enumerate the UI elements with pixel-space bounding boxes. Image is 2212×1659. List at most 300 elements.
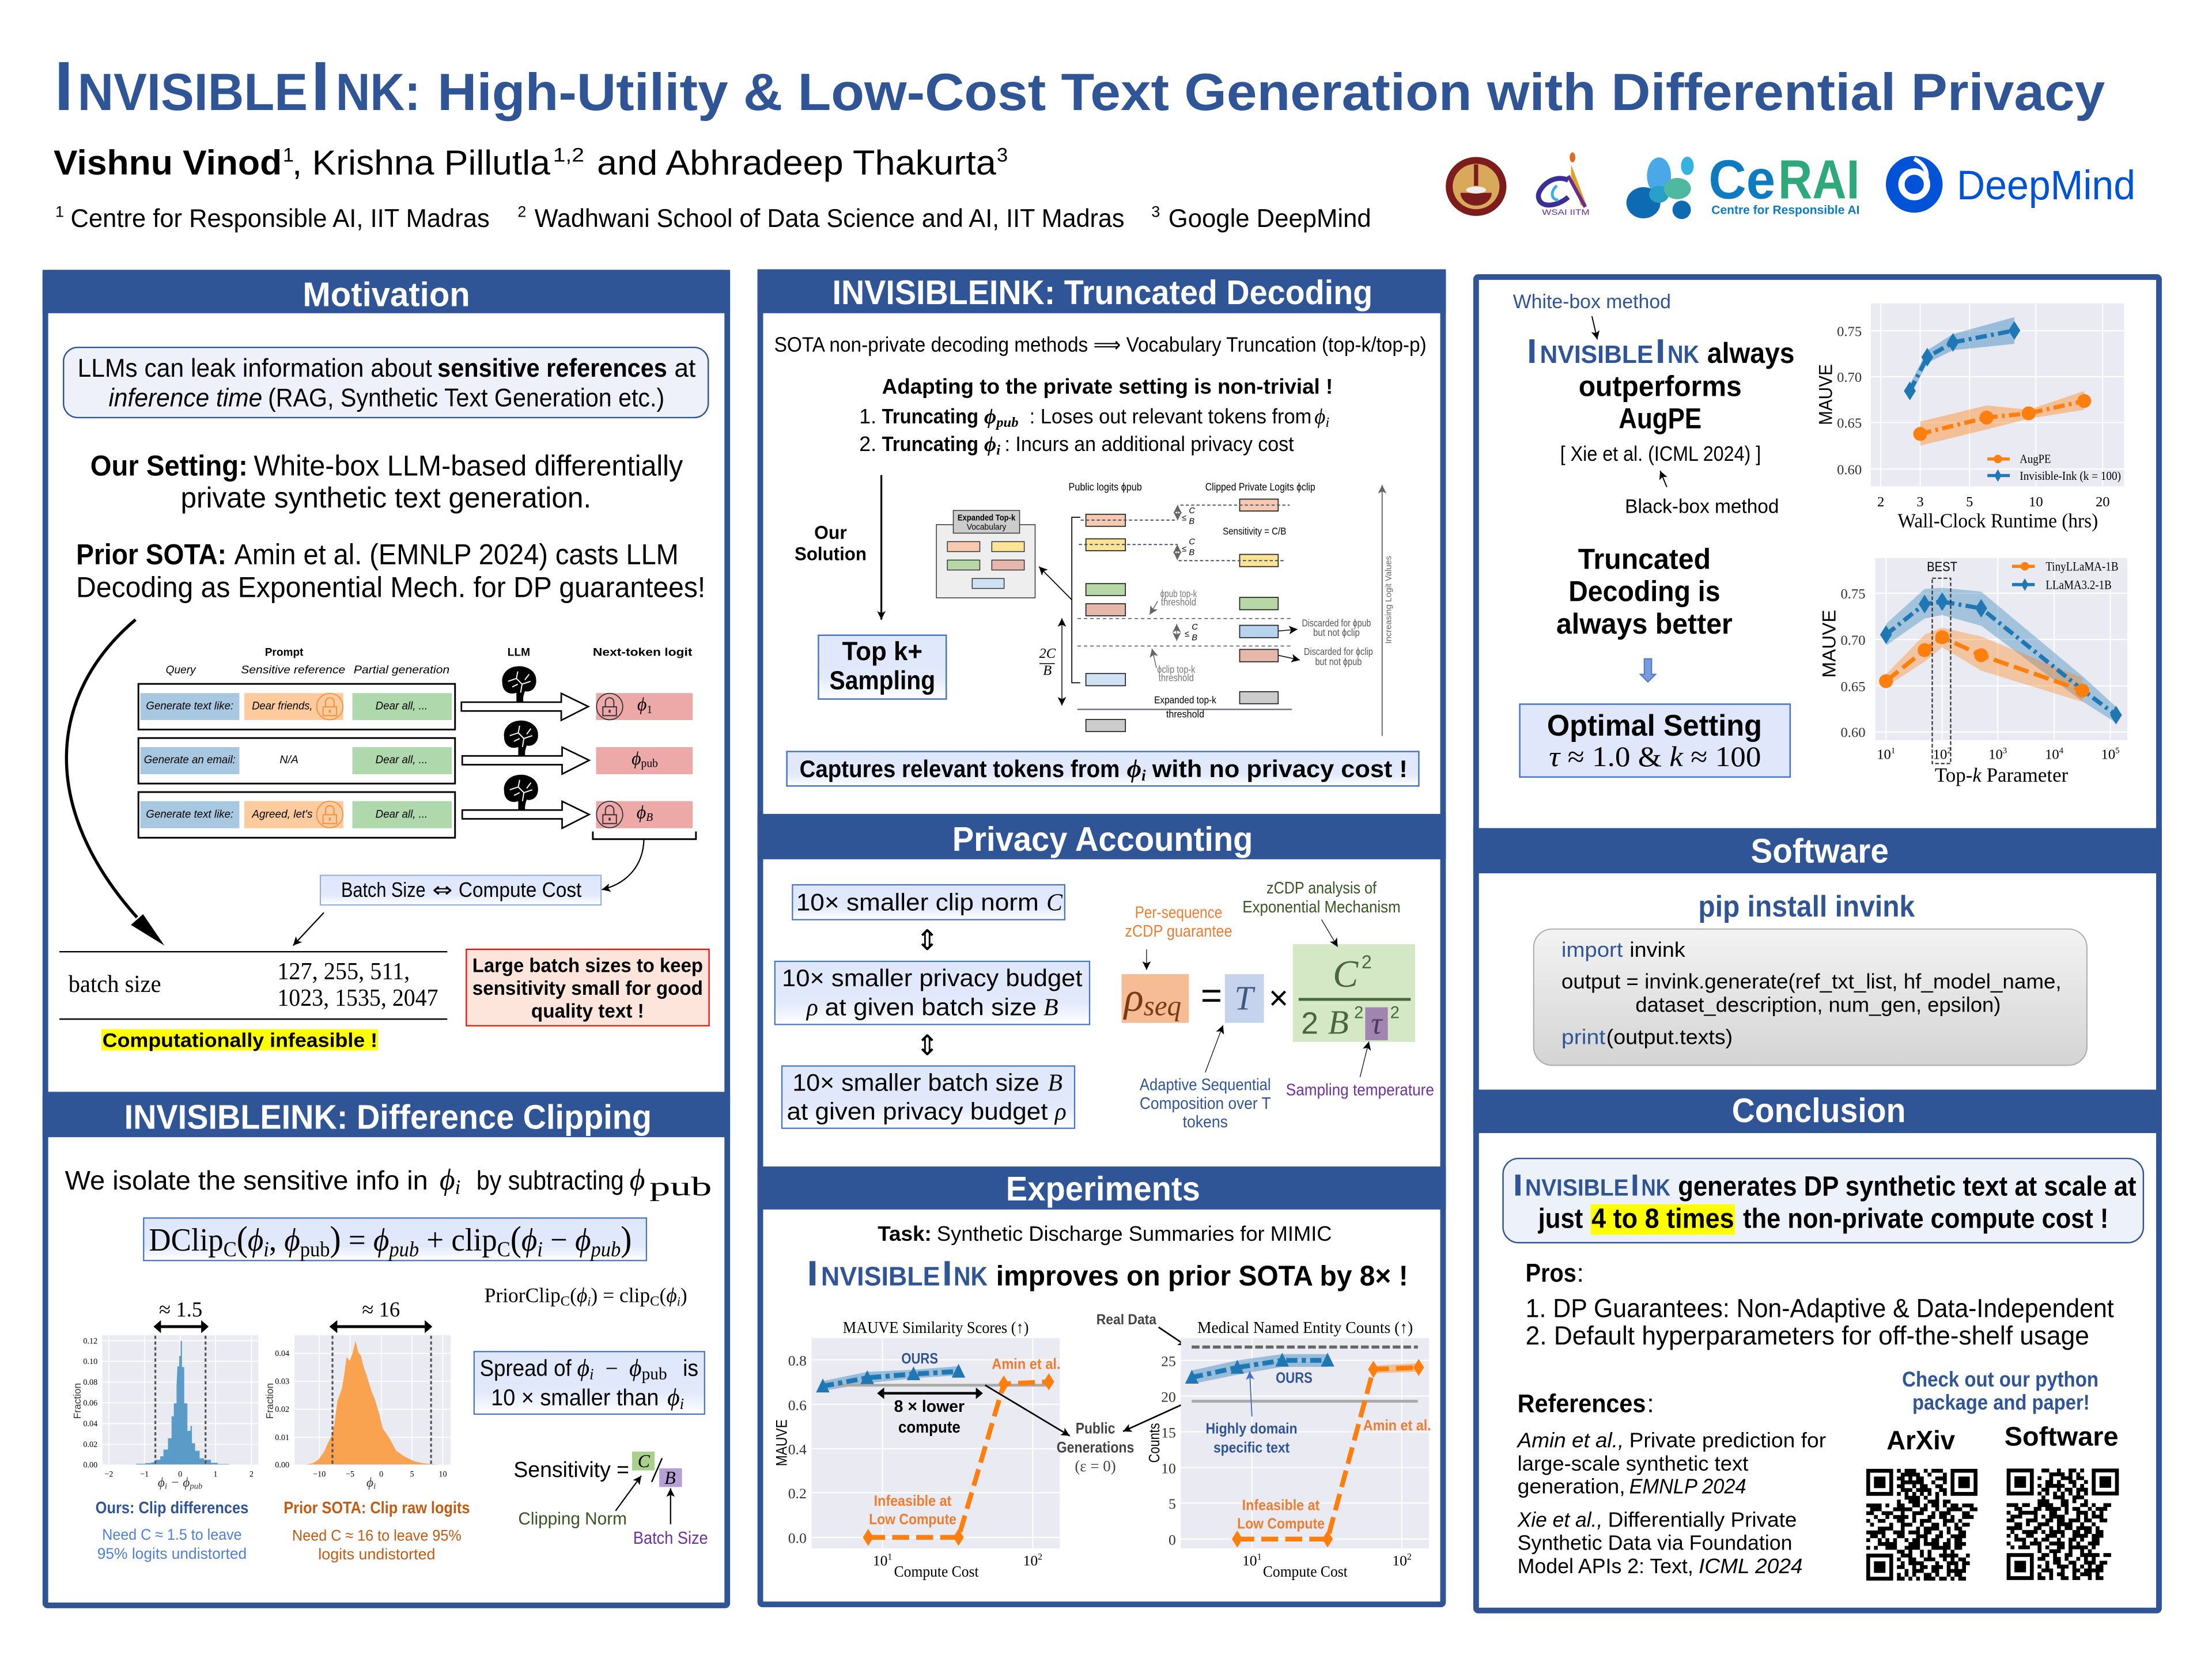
QR: ArXiv <box>1866 1425 1977 1579</box>
diagram: logit columns: threshold <box>1159 672 1194 683</box>
caption: prior SOTA: Need C ≈ 16 to leave 95% <box>292 1527 462 1544</box>
chart: medical named entity counts <box>1147 1319 1431 1580</box>
logo: CeRAI: RAI <box>1778 149 1859 211</box>
formula: DClip: = ϕ <box>349 1221 389 1257</box>
label: adaptive composition: Composition over T <box>1140 1094 1271 1112</box>
formula: DClip: , <box>269 1221 284 1257</box>
bracket and arrow <box>593 831 696 889</box>
chart: top-k vs MAUVE: 2 <box>1947 747 1952 756</box>
chart: medical named entity counts: 1 <box>1257 1552 1262 1562</box>
histogram: clip differences: 0.00 <box>83 1461 97 1470</box>
heading: Software: Software <box>1750 832 1889 870</box>
list: truncation problems: pub <box>995 415 1019 430</box>
formula: DClip: pub <box>387 1237 419 1261</box>
callout: key result: I <box>1631 1168 1639 1202</box>
callout: key result: the non-private compute cost ! <box>1743 1203 2108 1234</box>
chart: MAUVE similarity scores: 1 <box>887 1552 892 1562</box>
row 3: Agreed, let's <box>251 808 313 821</box>
heading: improves on SOTA: I <box>942 1253 952 1293</box>
formula: PriorClip: PriorClip <box>485 1283 561 1306</box>
label: adaptive composition <box>1140 1025 1271 1131</box>
diagram: logit columns: 2C <box>1039 646 1056 661</box>
logit outputs: ϕ <box>637 802 646 822</box>
formula: sensitivity: Sensitivity = <box>513 1458 629 1482</box>
chart: runtime vs MAUVE: Invisible-Ink (k = 100) <box>2020 469 2121 483</box>
callout: large batch sizes <box>466 949 709 1026</box>
row 3: Dear all, ... <box>376 808 428 821</box>
chart: MAUVE similarity scores: 0.8 <box>788 1352 807 1369</box>
diagram: logit columns: ≤ <box>1182 545 1186 554</box>
callout: Top k+ sampling: Sampling <box>830 665 935 695</box>
formula: PriorClip: i <box>677 1294 680 1309</box>
label: zCDP analysis: Exponential Mechanism <box>1242 897 1401 916</box>
title: NK: <box>336 63 421 122</box>
formula: PriorClip: ϕ <box>666 1283 677 1306</box>
callout: LLMs leak: sensitive references <box>437 354 667 382</box>
diagram: logit columns: but not ϕclip <box>1313 627 1360 638</box>
text: isolate sensitive info: We isolate the sensitive info in <box>65 1165 428 1195</box>
chart: MAUVE similarity scores: compute <box>898 1418 961 1436</box>
diagram: logit columns: Increasing Logit Values <box>1385 556 1394 644</box>
text: check out package: Check out our python <box>1902 1368 2098 1391</box>
text: our setting <box>90 449 683 514</box>
chart: runtime vs MAUVE <box>1815 304 2124 532</box>
panel: Software <box>1473 830 2162 1093</box>
row 1 <box>138 684 455 729</box>
chart: top-k vs MAUVE: 0.60 <box>1840 725 1866 741</box>
heading: Motivation: Motivation <box>303 276 470 314</box>
zoomed contents <box>71 1283 708 1563</box>
highlight: computationally infeasible: Computationally infeasible ! <box>103 1030 377 1052</box>
chart: MAUVE similarity scores: Infeasible at <box>874 1493 952 1509</box>
histogram: clip differences: 2 <box>249 1470 254 1479</box>
code block <box>1534 929 2087 1065</box>
references <box>1517 1390 1826 1578</box>
row 1: Generate text like: <box>146 700 233 713</box>
callout: spread: is <box>683 1355 698 1381</box>
formula: PriorClip: i <box>587 1294 591 1309</box>
text: white-box method note <box>1513 291 1671 339</box>
authors: 1,2 <box>553 145 584 166</box>
column headings <box>166 647 693 676</box>
callout: key result: NVISIBLE <box>1525 1174 1629 1200</box>
text: isolate sensitive info: i <box>455 1177 460 1199</box>
heading: improves on SOTA <box>807 1253 1408 1293</box>
panel: Motivation <box>43 270 730 1099</box>
chart: medical named entity counts: OURS <box>1276 1370 1313 1387</box>
text: task: Synthetic Discharge Summaries for MIMIC <box>937 1222 1332 1245</box>
histogram: clip differences: −1 <box>140 1470 149 1479</box>
callout: key result: NK <box>1641 1174 1670 1200</box>
chart: MAUVE similarity scores: OURS <box>901 1351 938 1367</box>
formula: DClip: C <box>497 1237 511 1261</box>
panel: Conclusion <box>1473 1090 2162 1611</box>
equation: per-sequence zCDP: × <box>1269 979 1288 1017</box>
formula: DClip: pub <box>589 1237 621 1261</box>
text: truncated decoding: Decoding is <box>1568 575 1721 608</box>
chart: top-k vs MAUVE <box>1819 558 2127 786</box>
chart: medical named entity counts: Medical Named Entity Counts (↑) <box>1197 1319 1413 1337</box>
column headings: Sensitive reference <box>241 664 345 676</box>
text: isolate sensitive info: by subtracting <box>477 1165 624 1195</box>
text: always outperforms: I <box>1655 332 1665 370</box>
formula: sensitivity: C <box>638 1451 651 1471</box>
chart: medical named entity counts: 20 <box>1161 1388 1176 1405</box>
text: always outperforms: AugPE <box>1619 402 1701 434</box>
formula: DClip: ) <box>621 1219 632 1259</box>
callout: spread <box>474 1351 705 1414</box>
label: per-sequence guarantee <box>1125 903 1232 970</box>
chart: medical named entity counts: 2 <box>1407 1552 1412 1562</box>
annotation: spread 16: ≈ 16 <box>362 1297 400 1321</box>
formula: PriorClip: ) <box>680 1283 687 1306</box>
label: sampling temperature: Sampling temperature <box>1286 1080 1434 1099</box>
box: batch size: at given privacy budget <box>787 1098 1048 1125</box>
histogram: raw logits: −5 <box>346 1470 354 1479</box>
references: ICML 2024 <box>1699 1555 1803 1578</box>
diagram: logit columns: threshold <box>1161 596 1196 608</box>
icons: LLM brains <box>502 666 538 810</box>
text: always outperforms <box>1527 332 1795 434</box>
formula: sensitivity: Batch Size <box>633 1528 708 1548</box>
formula: DClip: − <box>543 1221 575 1257</box>
chart: MAUVE similarity scores: Low Compute <box>869 1512 956 1528</box>
histogram: raw logits: 0.00 <box>275 1461 289 1470</box>
histogram: clip differences: i <box>165 1482 167 1491</box>
logit outputs: ϕ <box>637 694 646 714</box>
label: per-sequence guarantee: Per-sequence <box>1135 903 1222 922</box>
caption: ours <box>96 1498 248 1562</box>
list: truncation problems: Truncating <box>882 405 978 428</box>
callout: captures relevant tokens <box>787 752 1419 786</box>
references: References <box>1518 1390 1646 1418</box>
row 3: Generate text like: <box>146 808 233 821</box>
equation: per-sequence zCDP <box>1122 944 1415 1042</box>
chart: runtime vs MAUVE: 5 <box>1966 494 1973 510</box>
chart: top-k vs MAUVE: TinyLLaMA-1B <box>2045 559 2119 574</box>
formula: DClip: ϕ <box>248 1221 263 1257</box>
diagram: logit columns: ϕpub top-k <box>1160 588 1197 599</box>
row 2 <box>138 738 455 783</box>
chart: top-k vs MAUVE: 10 <box>2045 747 2059 762</box>
chart: MAUVE similarity scores: 0.0 <box>788 1530 807 1547</box>
chart: medical named entity counts: Highly domain <box>1205 1421 1298 1437</box>
chart: runtime vs MAUVE: MAUVE <box>1815 364 1836 425</box>
equation: per-sequence zCDP: 2 <box>1362 952 1372 972</box>
histogram: raw logits <box>264 1335 451 1491</box>
label: adaptive composition: tokens <box>1183 1112 1228 1131</box>
diagram: logit columns: Sensitivity = C/B <box>1223 525 1286 537</box>
list: truncation problems: ϕ <box>984 404 996 428</box>
diagram: logit columns: threshold <box>1166 708 1204 720</box>
box: batch size: 10× smaller batch size <box>792 1069 1039 1096</box>
title <box>55 47 2105 125</box>
callout: key result: I <box>1513 1168 1523 1202</box>
text: check out package: package and paper! <box>1912 1391 2090 1414</box>
caption: ours: Need C ≈ 1.5 to leave <box>102 1526 242 1543</box>
affiliations: 3 <box>1151 203 1160 221</box>
histogram: raw logits: i <box>373 1482 376 1491</box>
box: privacy budget: at given batch size <box>825 993 1037 1020</box>
diagram: logit columns: ϕclip top-k <box>1157 664 1196 675</box>
list: pros: 1. DP Guarantees: Non-Adaptive & Data-Independent <box>1526 1293 2114 1323</box>
chart: MAUVE similarity scores <box>773 1319 1061 1580</box>
panel: Difference Clipping <box>43 1094 730 1605</box>
affiliations: Google DeepMind <box>1169 204 1371 233</box>
diagram: logit columns: B <box>1189 517 1194 527</box>
arrows: LLM outputs <box>462 694 589 828</box>
chart: MAUVE similarity scores: 2 <box>1038 1552 1042 1562</box>
formula: DClip: ϕ <box>521 1221 537 1257</box>
references: EMNLP 2024 <box>1629 1475 1746 1498</box>
text: always outperforms: NK <box>1667 341 1699 369</box>
references: Model APIs 2: Text, <box>1518 1555 1693 1578</box>
heading: Truncated Decoding: INVISIBLEINK: Truncated Decoding <box>833 274 1372 312</box>
chart: runtime vs MAUVE: 10 <box>2029 494 2043 510</box>
text: always outperforms: outperforms <box>1579 370 1742 403</box>
callout: LLMs leak: LLMs can leak information about <box>78 354 432 382</box>
formula: PriorClip: ( <box>570 1283 577 1306</box>
annotation: spread 16 <box>330 1297 432 1333</box>
histogram: clip differences: pub <box>189 1482 202 1491</box>
chart: runtime vs MAUVE: 0.75 <box>1837 324 1862 339</box>
callout: LLMs leak: at <box>674 354 695 382</box>
histogram: clip differences: 0.02 <box>83 1440 97 1449</box>
table: batch sizes: batch size <box>69 971 161 998</box>
logos <box>1446 149 2135 219</box>
label: real data: Real Data <box>1096 1312 1156 1328</box>
chart: runtime vs MAUVE: 2 <box>1877 494 1884 510</box>
formula: sensitivity: Clipping Norm <box>518 1509 627 1529</box>
label: public generations <box>985 1385 1186 1475</box>
text: truncated decoding: Truncated <box>1578 543 1711 575</box>
equation: per-sequence zCDP: τ <box>1371 1006 1383 1040</box>
authors: 3 <box>997 145 1008 166</box>
formula: DClip: ϕ <box>284 1221 300 1257</box>
logo: IIT Madras seal <box>1446 157 1506 216</box>
box: privacy budget: B <box>1043 994 1058 1021</box>
panel: Experiments <box>758 1166 1446 1604</box>
formula: DClip: i <box>263 1237 269 1261</box>
histogram: clip differences: 0.12 <box>83 1336 97 1346</box>
panel: Truncated Decoding <box>758 269 1446 820</box>
histogram: clip differences <box>71 1335 258 1491</box>
list: truncation problems: 1. <box>859 405 876 428</box>
column headings: Next-token logit <box>593 647 693 659</box>
box: clip norm: C <box>1046 889 1063 916</box>
logo: DeepMind <box>1886 156 2135 213</box>
text: check out package <box>1902 1368 2098 1414</box>
text: prior SOTA: Amin et al. (EMNLP 2024) casts LLM <box>235 538 679 571</box>
logo: WSAI IITM: WSAI IITM <box>1542 208 1590 217</box>
list: truncation problems: 2. <box>859 433 876 456</box>
chart: runtime vs MAUVE: 0.65 <box>1837 416 1862 431</box>
equation: per-sequence zCDP: T <box>1235 979 1256 1017</box>
references: Synthetic Data via Foundation <box>1518 1531 1793 1554</box>
label: per-sequence guarantee: zCDP guarantee <box>1125 922 1232 940</box>
label: public generations: Public <box>1076 1420 1115 1437</box>
diagram: logit columns: Clipped Private Logits ϕclip <box>1205 481 1315 493</box>
diagram: logit columns: Discarded for ϕclip <box>1304 646 1373 657</box>
histogram: raw logits: 0.01 <box>275 1433 289 1442</box>
label: public generations: (ε = 0) <box>1075 1457 1116 1475</box>
callout: LLMs leak: inference time <box>109 384 262 412</box>
icon: equivalence: ⇕ <box>916 923 939 957</box>
code block: dataset_description, num_gen, epsilon) <box>1635 993 2001 1016</box>
logo: DeepMind: DeepMind <box>1957 162 2135 209</box>
chart: runtime vs MAUVE: Wall-Clock Runtime (hrs) <box>1898 510 2098 532</box>
text: task: Task: <box>878 1222 932 1245</box>
column headings: Prompt <box>265 647 304 659</box>
list: truncation problems <box>859 404 1329 458</box>
histogram: clip differences: 0.10 <box>83 1357 97 1366</box>
list: truncation problems: i <box>996 442 1000 458</box>
histogram: clip differences: 0.06 <box>83 1399 97 1408</box>
text: our setting: Our Setting: <box>90 449 248 482</box>
zoomed contents <box>787 475 1419 786</box>
chart: MAUVE similarity scores: 10 <box>873 1552 887 1569</box>
text: prior SOTA <box>76 538 705 603</box>
text: isolate sensitive info: pub <box>649 1172 712 1202</box>
callout: batch size compute cost: ⇔ <box>432 878 453 902</box>
equation: per-sequence zCDP: 2 <box>1301 1006 1318 1040</box>
chart: medical named entity counts: 5 <box>1169 1495 1176 1512</box>
code block: invink <box>1629 938 1685 961</box>
histogram: raw logits: Fraction <box>264 1383 275 1419</box>
heading: improves on SOTA: NK <box>954 1261 988 1291</box>
list: truncation problems: : Incurs an additional privacy cost <box>1005 433 1294 456</box>
label: real data <box>1096 1312 1186 1346</box>
code block: print <box>1561 1026 1605 1049</box>
histogram: raw logits: 5 <box>410 1470 414 1479</box>
diagram: logit columns: ≤ <box>1185 630 1189 639</box>
chart: top-k vs MAUVE: 10 <box>1877 747 1891 762</box>
equation: per-sequence zCDP: seq <box>1144 990 1181 1021</box>
box: privacy budget: 10× smaller privacy budget <box>782 964 1083 991</box>
callout: spread: i <box>589 1366 594 1383</box>
formula: PriorClip: ϕ <box>577 1283 587 1306</box>
diagram: logit columns: B <box>1189 548 1194 558</box>
chart: MAUVE similarity scores: 0.6 <box>788 1397 807 1414</box>
heading: Privacy Accounting: Privacy Accounting <box>952 820 1253 858</box>
table: batch sizes: 1023, 1535, 2047 <box>277 985 438 1012</box>
chart: medical named entity counts: 10 <box>1392 1552 1407 1569</box>
box: clip norm <box>792 885 1065 920</box>
diagram: logit columns: but not ϕpub <box>1315 656 1362 667</box>
arrow: down <box>1640 659 1656 682</box>
diagram: logit columns: Expanded top-k <box>1154 694 1216 706</box>
table: batch sizes <box>59 952 447 1019</box>
callout: key result: generates DP synthetic text at scale at <box>1678 1171 2137 1202</box>
formula: PriorClip: C <box>650 1294 660 1309</box>
callout: large batch sizes: sensitivity small for good <box>472 978 703 999</box>
diagram: logit columns <box>1039 481 1394 736</box>
references: large-scale synthetic text <box>1518 1452 1748 1475</box>
diagram: logit columns: C <box>1189 537 1195 547</box>
list: truncation problems: ϕ <box>984 432 996 456</box>
text: prior SOTA: Prior SOTA: <box>76 538 226 571</box>
callout: large batch sizes: quality text ! <box>531 1000 644 1022</box>
heading: improves on SOTA: I <box>807 1253 818 1293</box>
logit outputs: ϕ <box>632 748 641 768</box>
arrow: big curved arrow <box>66 620 164 945</box>
arrow: to table <box>293 912 324 945</box>
histogram: clip differences: 1 <box>213 1470 217 1479</box>
callout: optimal setting: Optimal Setting <box>1547 709 1762 742</box>
label: zCDP analysis: zCDP analysis of <box>1266 878 1377 897</box>
title: I <box>55 47 73 125</box>
chart: medical named entity counts: Counts <box>1147 1423 1163 1463</box>
diagram: logit columns: ≤ <box>1182 513 1186 522</box>
chart: medical named entity counts: Infeasible at <box>1242 1497 1320 1514</box>
text: our setting: White-box LLM-based differentially <box>254 449 683 482</box>
heading: Conclusion: Conclusion <box>1732 1092 1905 1130</box>
formula: DClip: pub <box>300 1237 330 1261</box>
chart: runtime vs MAUVE: 3 <box>1916 494 1924 510</box>
column headings: Query <box>166 664 196 676</box>
callout: batch size compute cost: Batch Size <box>341 878 426 902</box>
histogram: clip differences: 0.04 <box>83 1419 97 1429</box>
formula: PriorClip: C <box>561 1294 570 1309</box>
formula: sensitivity <box>513 1451 708 1548</box>
chart: MAUVE similarity scores: Compute Cost <box>894 1563 979 1580</box>
formula: DClip: ( <box>237 1219 248 1259</box>
histogram: clip differences: 0 <box>178 1470 182 1479</box>
annotation: spread 1.5: ≈ 1.5 <box>159 1297 202 1321</box>
histogram: clip differences: 0.08 <box>83 1378 97 1387</box>
formula: DClip: ( <box>511 1219 521 1259</box>
label: public generations: Generations <box>1057 1438 1134 1456</box>
histogram: clip differences: −2 <box>104 1470 113 1479</box>
panel: Privacy Accounting <box>758 817 1446 1170</box>
logo: WSAI IITM <box>1538 153 1590 217</box>
chart: top-k vs MAUVE: 1 <box>1891 747 1895 756</box>
callout: key result: just <box>1538 1203 1583 1234</box>
diagram: logit columns: B <box>1043 663 1052 679</box>
label: our solution <box>795 522 867 564</box>
text: our setting: private synthetic text generation. <box>181 481 591 514</box>
logo: CeRAI: Centre for Responsible AI <box>1711 204 1859 217</box>
title: I <box>311 47 330 125</box>
chart: runtime vs MAUVE: 0.60 <box>1837 462 1862 478</box>
icon: equivalence: ⇕ <box>916 1028 939 1062</box>
chart: top-k vs MAUVE: 10 <box>2101 747 2115 762</box>
formula: DClip: ) <box>330 1219 341 1259</box>
row 3 <box>138 792 455 838</box>
authors: Vishnu Vinod <box>54 143 282 182</box>
caption: prior SOTA <box>283 1498 470 1563</box>
references: Xie et al., <box>1517 1509 1602 1532</box>
histogram: raw logits: 10 <box>438 1470 447 1479</box>
chart: runtime vs MAUVE: 0.70 <box>1837 370 1862 385</box>
logo: CeRAI: Ce <box>1708 149 1775 211</box>
row 1: Dear all, ... <box>376 700 428 713</box>
callout: key result <box>1503 1158 2143 1243</box>
diagram: batch of prompts to logits <box>59 620 709 1052</box>
references: Differentially Private <box>1608 1509 1797 1532</box>
callout: captures relevant tokens: ϕ <box>1127 755 1141 783</box>
histogram: raw logits: 0.02 <box>275 1405 289 1414</box>
list: pros: 2. Default hyperparameters for off-the-shelf usage <box>1526 1321 2089 1350</box>
text: isolate sensitive info <box>65 1164 712 1202</box>
chart: runtime vs MAUVE: 20 <box>2096 494 2110 510</box>
affiliations: 2 <box>517 203 526 221</box>
authors: and Abhradeep Thakurta <box>597 143 996 182</box>
text: SOTA decoding: SOTA non-private decoding methods ⟹ Vocabulary Truncation (top-k/top-p) <box>774 333 1427 356</box>
callout: spread: i <box>680 1395 684 1412</box>
references: : <box>1647 1390 1654 1418</box>
panel: White-box results <box>1476 277 2159 834</box>
